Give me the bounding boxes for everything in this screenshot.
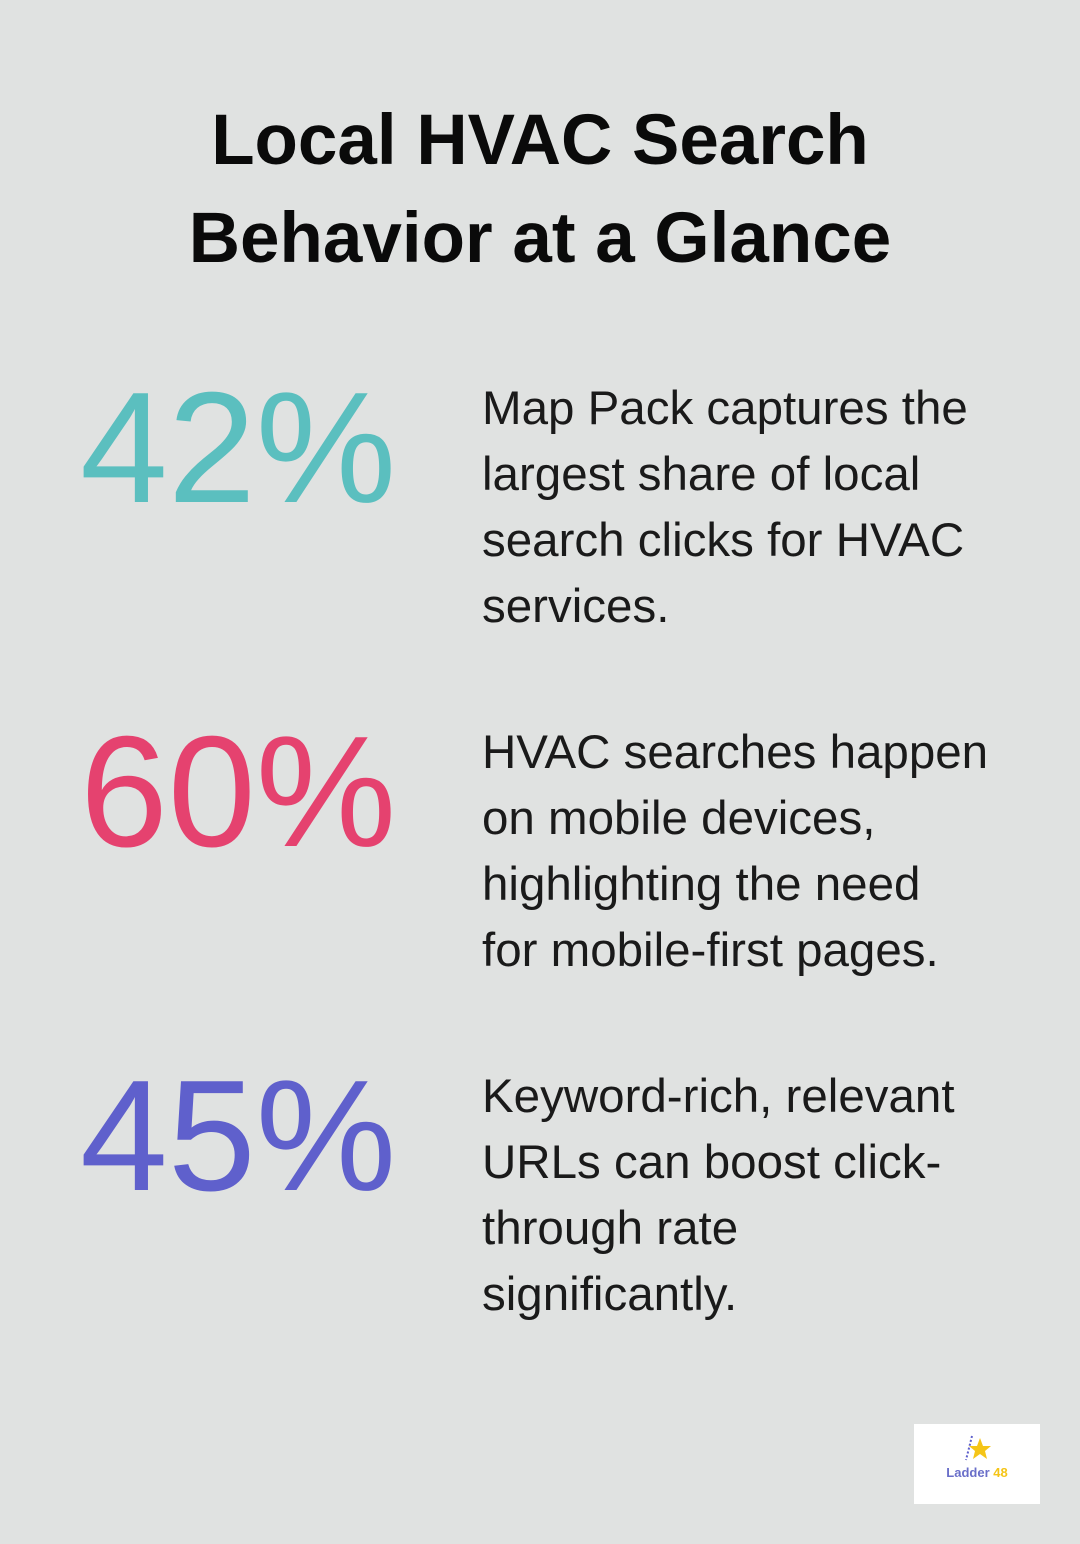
stat 1 text <box>482 382 968 633</box>
title: Behavior at a Glance <box>189 199 891 278</box>
title <box>189 101 891 278</box>
stat 1 text: search clicks for HVAC <box>482 514 964 567</box>
stat 3 text <box>482 1070 955 1321</box>
logo <box>914 1424 1040 1504</box>
stat 1 text: largest share of local <box>482 448 920 501</box>
stat 3 number: 45% <box>80 1048 396 1224</box>
stat 2 text <box>482 726 988 977</box>
stat 1 text: Map Pack captures the <box>482 382 968 435</box>
stat 2 text: for mobile-first pages. <box>482 924 939 977</box>
logo text: Ladder 48 <box>946 1465 1008 1480</box>
stat 3 text: URLs can boost click- <box>482 1136 941 1189</box>
stat 1 number: 42% <box>80 360 396 536</box>
stat 3 text: through rate <box>482 1202 738 1255</box>
stat 2 text: HVAC searches happen <box>482 726 988 779</box>
stat 2 text: highlighting the need <box>482 858 920 911</box>
stat 2 text: on mobile devices, <box>482 792 875 845</box>
stat 3 text: Keyword-rich, relevant <box>482 1070 955 1123</box>
stat 3 text: significantly. <box>482 1268 737 1321</box>
stat 2 number: 60% <box>80 704 396 880</box>
title: Local HVAC Search <box>211 101 869 180</box>
icon: ladder star <box>965 1436 991 1460</box>
stat 1 text: services. <box>482 580 669 633</box>
